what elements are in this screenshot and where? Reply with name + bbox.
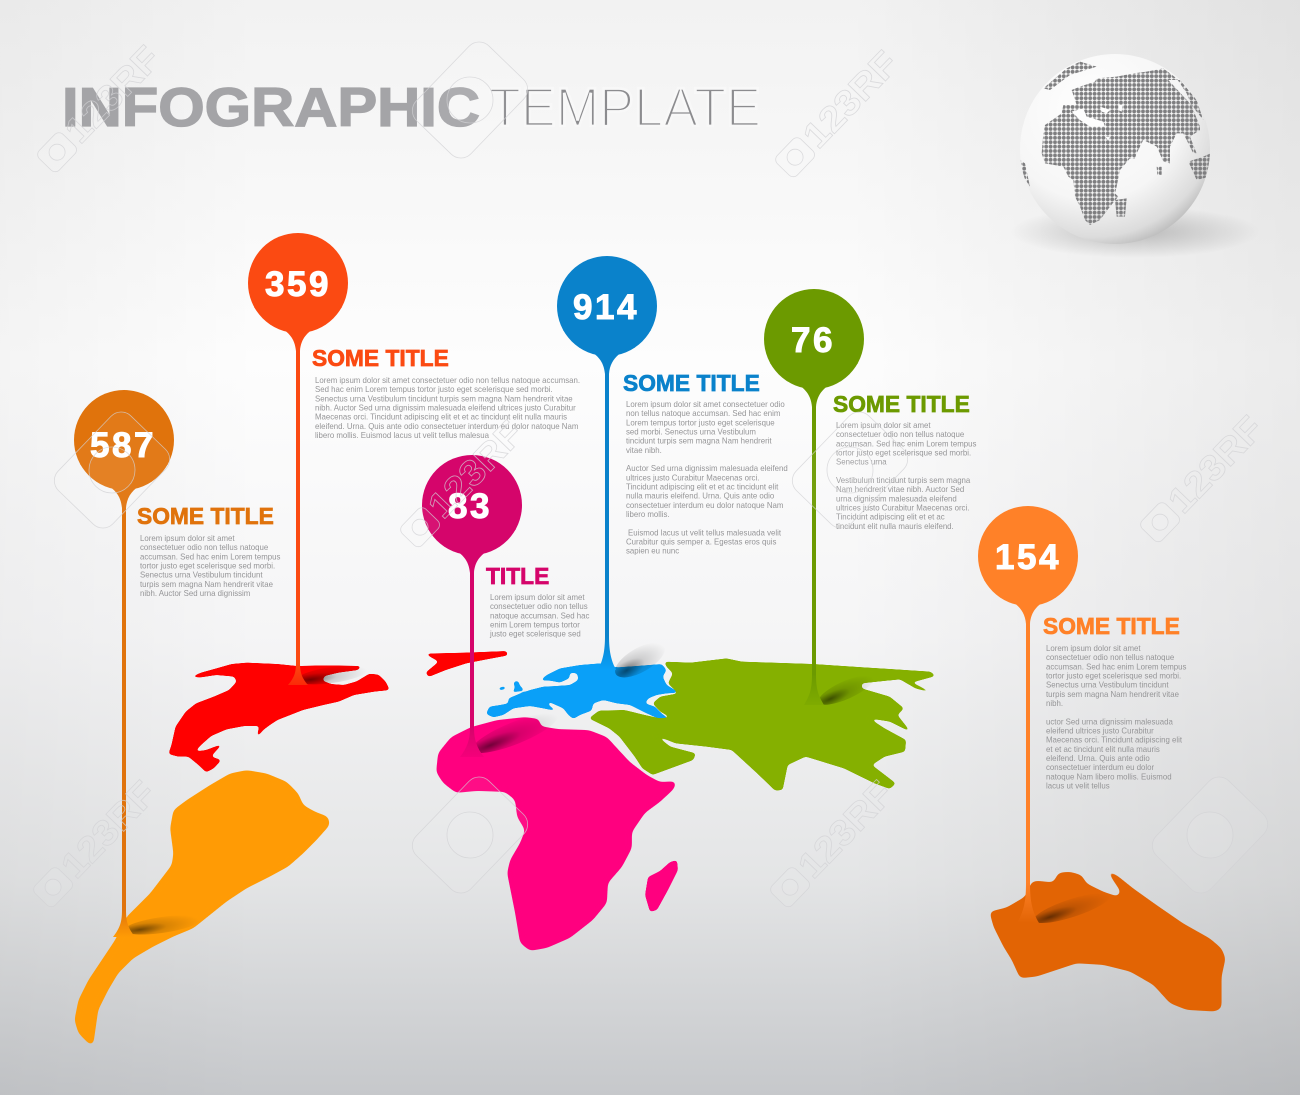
text 154: et et ac tincidunt elit nulla mauris [1046, 745, 1160, 754]
heading 359: SOME TITLE [312, 345, 449, 371]
text 914: tincidunt turpis sem magna Nam hendrerit [626, 437, 772, 446]
text 76: tortor justo eget scelerisque sed morbi. [836, 449, 971, 458]
world map [74, 636, 1226, 1045]
heading 76: SOME TITLE [833, 391, 970, 417]
pin 359 [248, 233, 348, 685]
text 154: uctor Sed urna dignissim malesuada [1046, 717, 1174, 726]
text 154: natoque Nam libero mollis. Euismod [1046, 772, 1172, 781]
text 359: Senectus urna Vestibulum tincidunt turpis sem magna Nam hendrerit vitae [315, 394, 573, 403]
text 83: enim Lorem tempus tortor [490, 621, 580, 630]
text 76: Lorem ipsum dolor sit amet [836, 421, 931, 430]
map: north america [168, 663, 390, 772]
panel: 83 [422, 455, 589, 757]
heading 83: TITLE [486, 563, 549, 589]
text 914: consectetuer interdum eu dolor natoque Nam [626, 501, 784, 510]
text 587: Senectus urna Vestibulum tincidunt [140, 571, 263, 580]
text 154: nibh. [1046, 699, 1063, 708]
text 914: ultrices justo Curabitur Maecenas orci. [626, 473, 759, 482]
text 154: eleifend. Urna. Quis ante odio [1046, 754, 1150, 763]
text 154: Maecenas orci. Tincidunt adipiscing elit [1046, 736, 1183, 745]
text 154: consectetuer interdum eu dolor [1046, 763, 1155, 772]
text 914: Euismod lacus ut velit tellus malesuada velit [628, 528, 782, 537]
text 359: eleifend. Urna. Quis ante odio consectetuer interdum eu dolor natoque Nam [315, 422, 579, 431]
text 83: consectetuer odio non tellus [490, 602, 588, 611]
value 154: 154 [995, 538, 1061, 577]
text 76: Vestibulum tincidunt turpis sem magna [836, 476, 971, 485]
pin 83 [422, 455, 522, 757]
panel: 154 [978, 506, 1186, 923]
text 587: consectetuer odio non tellus natoque [140, 543, 269, 552]
watermarks: 123RF [790, 773, 901, 886]
text 154: Lorem ipsum dolor sit amet [1046, 644, 1141, 653]
globe ground shadow [1010, 206, 1260, 258]
map: asia [589, 658, 938, 791]
title bold word: INFOGRAPHIC [62, 76, 480, 138]
panel: 587 [74, 390, 280, 937]
text 76: consectetuer odio non tellus natoque [836, 430, 965, 439]
text 76: Nam hendrerit vitae nibh. Auctor Sed [836, 485, 964, 494]
text 154: turpis sem magna Nam hendrerit vitae [1046, 690, 1180, 699]
text 359: libero mollis. Euismod lacus ut velit tellus malesua [315, 431, 490, 440]
value 76: 76 [791, 321, 835, 360]
text 914: nulla mauris eleifend. Urna. Quis ante odio [626, 492, 775, 501]
value 914: 914 [573, 288, 639, 327]
text 154: accumsan. Sed hac enim Lorem tempus [1046, 662, 1186, 671]
text 76: Tincidunt adipiscing elit et et ac [836, 513, 945, 522]
text 154: tortor justo eget scelerisque sed morbi. [1046, 672, 1181, 681]
text 359: Sed hac enim Lorem tempus tortor justo eget scelerisque sed morbi. [315, 385, 553, 394]
text 76: accumsan. Sed hac enim Lorem tempus [836, 439, 976, 448]
text 914: libero mollis. [626, 510, 670, 519]
text 587: accumsan. Sed hac enim Lorem tempus [140, 552, 280, 561]
text 914: Lorem ipsum dolor sit amet consectetuer odio [626, 400, 785, 409]
text 914: sed morbi. Senectus urna Vestibulum [626, 428, 756, 437]
text 914: Tincidunt adipiscing elit et et ac tincidunt elit [626, 483, 779, 492]
text 914: Auctor Sed urna dignissim malesuada eleifend [626, 464, 788, 473]
map: greenland [424, 651, 508, 677]
text 359: Maecenas orci. Tincidunt adipiscing elit et et ac tincidunt elit nulla mauris [315, 413, 567, 422]
title [62, 76, 761, 138]
text 914: sapien eu nunc [626, 547, 679, 556]
text 154: consectetuer odio non tellus natoque [1046, 653, 1175, 662]
globe sphere [1020, 54, 1210, 244]
text 76: Senectus urna [836, 458, 887, 467]
heading 587: SOME TITLE [137, 503, 274, 529]
map: africa [436, 717, 677, 951]
heading 914: SOME TITLE [623, 370, 760, 396]
pin 914 [557, 256, 657, 670]
watermarks: 123RF [53, 773, 164, 886]
text 154: Senectus urna Vestibulum tincidunt [1046, 681, 1169, 690]
text 83: justo eget scelerisque sed [489, 630, 581, 639]
map: europe [486, 663, 680, 719]
text 154: eleifend ultrices justo Curabitur [1046, 727, 1154, 736]
text 154: lacus ut velit tellus [1046, 782, 1110, 791]
text 914: non tellus natoque accumsan. Sed hac enim [626, 409, 781, 418]
text 587: tortor justo eget scelerisque sed morbi. [140, 562, 275, 571]
globe dotted continents [1020, 62, 1211, 225]
value 83: 83 [448, 487, 492, 526]
text 587: Lorem ipsum dolor sit amet [140, 534, 235, 543]
map: madagascar [645, 860, 678, 912]
text 76: tincidunt elit nulla mauris eleifend. [836, 522, 954, 531]
panel: 914 [557, 256, 788, 670]
value 359: 359 [265, 265, 331, 304]
watermarks: 123RF [420, 413, 531, 526]
text 914: vitae nibh. [626, 446, 662, 455]
text 359: nibh. Auctor Sed urna dignissim malesuada eleifend ultrices justo Curabitur [315, 404, 576, 413]
text 587: nibh. Auctor Sed urna dignissim [140, 589, 251, 598]
text 83: natoque accumsan. Sed hac [490, 611, 589, 620]
text 76: urna dignissim malesuada eleifend [836, 494, 957, 503]
watermarks: 123RF [57, 38, 168, 151]
watermarks: 123RF [795, 43, 906, 156]
text 83: Lorem ipsum dolor sit amet [490, 593, 585, 602]
text 914: Curabitur quis semper a. Egestas eros quis [626, 538, 776, 547]
text 587: turpis sem magna Nam hendrerit vitae [140, 580, 274, 589]
heading 154: SOME TITLE [1043, 613, 1180, 639]
panel: 76 [764, 289, 976, 705]
map: south america [74, 770, 330, 1045]
title light word: TEMPLATE [489, 76, 761, 138]
panel: 359 [248, 233, 580, 685]
pin shadows on map [123, 636, 1113, 938]
pin 76 [764, 289, 864, 705]
map: australia [989, 868, 1226, 1012]
pin 154 [978, 506, 1078, 923]
text 914: Lorem tempus tortor justo eget scelerisque [626, 418, 775, 427]
icon: dotted globe [1020, 54, 1240, 254]
text 76: ultrices justo Curabitur Maecenas orci. [836, 504, 969, 513]
value 587: 587 [90, 426, 156, 465]
watermarks: 123RF [1160, 408, 1271, 521]
watermarks [26, 36, 1273, 913]
text 359: Lorem ipsum dolor sit amet consectetuer odio non tellus natoque accumsan. [315, 376, 580, 385]
pin 587 [74, 390, 174, 937]
